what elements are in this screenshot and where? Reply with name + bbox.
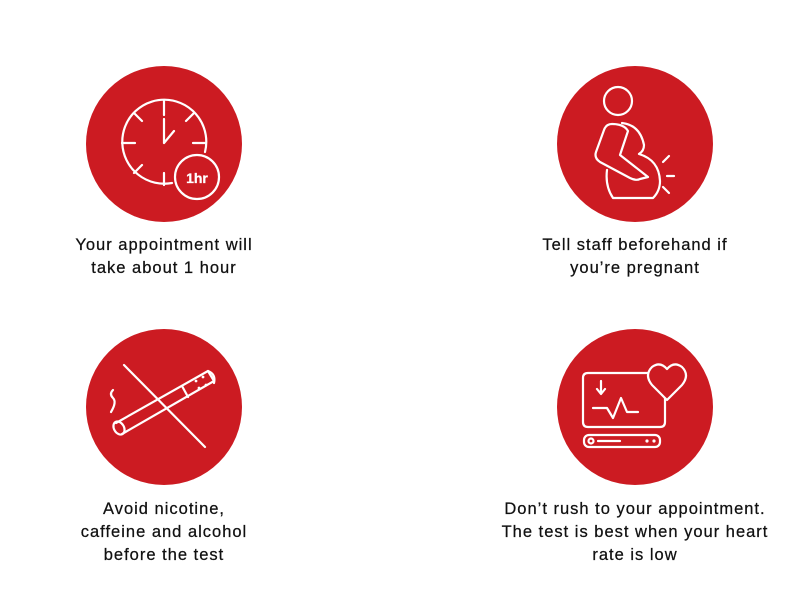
icon: heart monitor [557, 329, 713, 485]
caption: heart rate: Don’t rush to your appointment. [504, 500, 766, 518]
panel: avoid nicotine [81, 329, 247, 564]
caption: pregnancy: Tell staff beforehand if [542, 236, 728, 254]
panel: pregnancy [542, 66, 728, 277]
panel: avoid nicotine: caffeine and alcohol [81, 523, 247, 541]
icon: clock 1hr [86, 66, 242, 222]
caption: appointment time: Your appointment will [75, 236, 253, 254]
panel: appointment time [75, 66, 253, 277]
panel: heart rate [502, 329, 768, 564]
icon: no smoking [86, 329, 242, 485]
panel: avoid nicotine: before the test [104, 546, 224, 564]
panel: heart rate: rate is low [592, 546, 678, 564]
panel: appointment time: take about 1 hour [91, 259, 237, 277]
caption: avoid nicotine: Avoid nicotine, [103, 500, 225, 518]
panel: pregnancy: you’re pregnant [570, 259, 700, 277]
panel: heart rate: The test is best when your heart [502, 523, 768, 541]
icon: pregnant person [557, 66, 713, 222]
icon: clock 1hr: 1hr [186, 170, 208, 186]
